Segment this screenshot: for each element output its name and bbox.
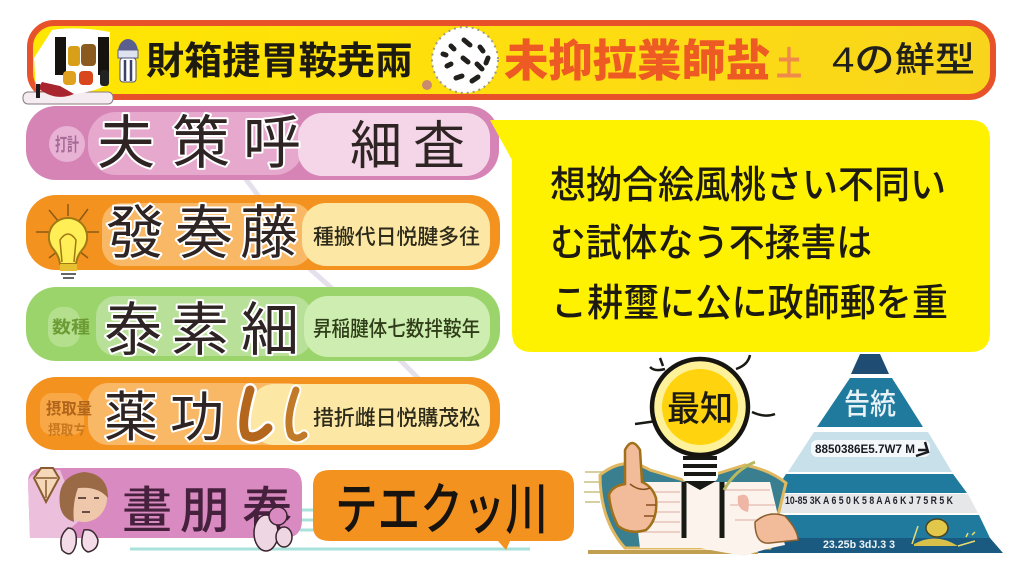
panel: orange check box: テエクッ川 bbox=[335, 478, 548, 541]
row 4 description: 措折雌日悦購茂松 bbox=[313, 407, 480, 430]
icon: feet bbox=[254, 507, 292, 551]
panel: row 5 pink bbox=[28, 468, 302, 554]
callout: yellow speech panel bbox=[490, 120, 990, 352]
icon: dotted circle bbox=[422, 27, 498, 93]
teal backdrop bbox=[600, 464, 786, 548]
pyramid band label: 8850386E5.7W7 M bbox=[815, 442, 915, 456]
pyramid band text: 10-85 3K A 6 5 0 K 5 8 A A 6 K J 7 5 R 5 K bbox=[785, 495, 953, 507]
header title right: 4の鮮型 bbox=[832, 41, 975, 80]
callout line 1: 想拗合絵風桃さい不同い bbox=[550, 165, 946, 207]
icon: turtle bbox=[912, 519, 975, 546]
panel: row 3 green bbox=[26, 287, 500, 363]
panel: orange check box bbox=[313, 470, 574, 550]
row 4 heading: 薬功 bbox=[104, 388, 224, 448]
small badge: 数種 bbox=[52, 318, 90, 337]
base line bbox=[588, 550, 758, 554]
wires bbox=[684, 482, 722, 538]
bulb label: 最知 bbox=[667, 390, 733, 429]
row 3 description: 昇稲腱体七数拌鞍年 bbox=[313, 318, 480, 341]
row 2 description: 種搬代日悦腱多往 bbox=[313, 226, 480, 249]
header title left: 財箱捷胃鞍尭兩 bbox=[146, 41, 413, 83]
row 5 heading: 畫朋春 bbox=[122, 483, 292, 539]
icon: dome bbox=[118, 39, 138, 82]
pyramid top label: 告統 bbox=[844, 388, 896, 421]
pyramid bottom label: 23.25b 3dJ.3 3 bbox=[823, 539, 895, 551]
icon: person bbox=[60, 472, 108, 554]
icon: building card bbox=[23, 28, 113, 104]
small badge: 摂取ㄘ bbox=[48, 422, 86, 438]
row 4 decorative strokes bbox=[244, 390, 304, 438]
illustration: lightbulb character with book bbox=[584, 355, 798, 556]
panel: row 2 orange bbox=[26, 195, 500, 278]
row 3 heading: 泰素細 bbox=[104, 298, 299, 363]
bulb neck bbox=[682, 455, 718, 490]
bulb head bbox=[652, 359, 748, 455]
panel: row 1 pink bbox=[26, 106, 499, 180]
icon: gem bbox=[34, 468, 59, 502]
icon: small figure bbox=[916, 442, 928, 456]
callout line 2: む試体なう不揉害は bbox=[550, 223, 872, 265]
small badge bbox=[40, 393, 92, 438]
book bbox=[632, 482, 785, 556]
small badge: 打計 bbox=[55, 135, 79, 155]
speed lines bbox=[584, 472, 604, 502]
header small glyph: 土 bbox=[776, 46, 802, 84]
icon: hand left bbox=[609, 443, 656, 532]
callout line 3: こ耕璽に公に政師郵を重 bbox=[551, 283, 948, 325]
panel: row 4 orange bbox=[26, 377, 500, 450]
row 2 heading: 發奏藤 bbox=[106, 201, 298, 266]
row 1 detail heading: 細査 bbox=[350, 118, 465, 176]
small badge bbox=[49, 126, 85, 162]
header banner bbox=[23, 23, 993, 104]
small badge bbox=[48, 307, 90, 347]
chart: pyramid bbox=[735, 354, 1003, 553]
icon: lightbulb bbox=[36, 204, 99, 278]
row 1 heading: 夫策呼 bbox=[97, 111, 301, 176]
small badge: 摂取量 bbox=[46, 400, 92, 418]
bulb filaments bbox=[635, 355, 775, 424]
icon: hand right bbox=[755, 514, 798, 543]
header title orange: 未抑拉業師盐 bbox=[504, 37, 770, 86]
